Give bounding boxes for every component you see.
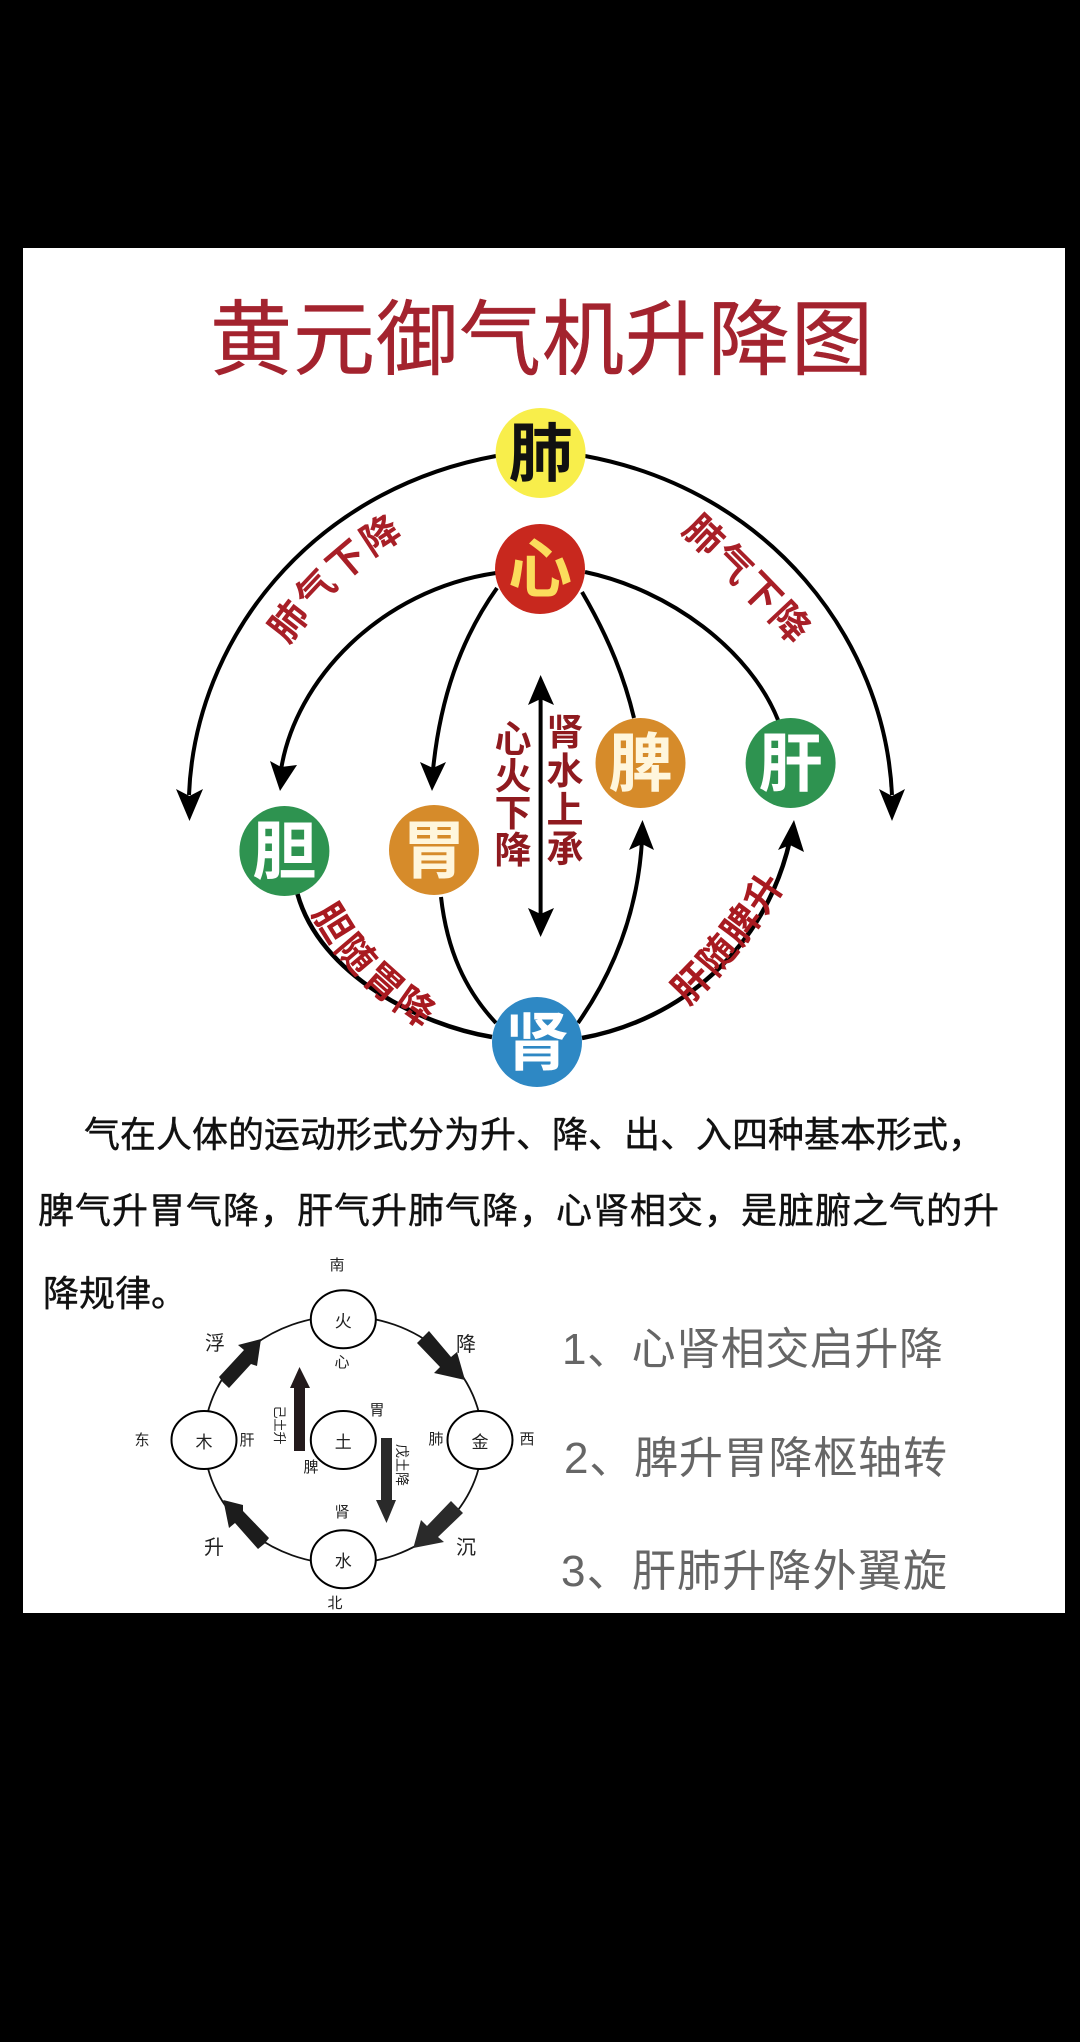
diagram labels: 升	[204, 1536, 224, 1559]
label: kidney water rises: 肾	[546, 712, 584, 753]
node: fire: 火	[335, 1312, 352, 1331]
label: heart fire descends: 火	[494, 756, 532, 797]
node: fire	[311, 1290, 376, 1348]
arrow: upper left	[219, 1339, 261, 1388]
node: lung: 肺	[509, 418, 573, 490]
label: heart fire descends: 下	[494, 793, 532, 834]
list: three key points: 1、心肾相交启升降	[562, 1325, 943, 1374]
node: gallbladder: 胆	[252, 816, 316, 888]
arrow: kidney to spleen	[578, 820, 654, 1023]
arrow: lower right	[413, 1501, 463, 1548]
label: kidney water rises: 承	[546, 829, 584, 870]
diagram labels: 己土升	[272, 1405, 287, 1445]
list: three key points	[561, 1325, 947, 1596]
node: spleen	[596, 718, 686, 808]
arrow: upper right	[417, 1331, 465, 1380]
diagram labels	[134, 1257, 535, 1612]
node: earth: 土	[335, 1433, 352, 1452]
node: heart	[495, 524, 585, 614]
label: kidney water rises: 上	[546, 790, 584, 831]
diagram labels: 沉	[456, 1536, 476, 1559]
label: heart fire descends: 降	[494, 830, 532, 871]
text block: description paragraph	[38, 1114, 999, 1314]
line: gallbladder to kidney	[298, 894, 492, 1037]
label: lung qi descends left: 肺气下降	[265, 514, 401, 645]
label: lung qi descends right: 肺气下降	[680, 511, 812, 643]
node: heart: 心	[508, 534, 572, 606]
node: kidney	[492, 997, 582, 1087]
arrow: heart to stomach	[420, 588, 497, 791]
list: three key points: 2、脾升胃降枢轴转	[564, 1434, 947, 1483]
node: water	[311, 1530, 376, 1588]
label: heart fire descends: 心	[494, 719, 532, 760]
diagram labels: 肾	[334, 1504, 350, 1521]
diagram labels: 南	[329, 1257, 345, 1274]
node: metal: 金	[472, 1433, 488, 1452]
arrow: kidney to liver	[582, 820, 804, 1038]
arrow: heart and kidney double arrow	[528, 675, 554, 937]
diagram labels: 浮	[205, 1332, 225, 1355]
label: kidney water rises	[546, 712, 584, 870]
node: water: 水	[335, 1552, 352, 1571]
node: gallbladder	[239, 806, 329, 896]
node: kidney: 肾	[505, 1007, 569, 1079]
diagram labels: 胃	[369, 1402, 385, 1419]
text block: description paragraph: 降规律。	[43, 1273, 187, 1314]
diagram labels: 北	[327, 1595, 343, 1612]
node: stomach: 胃	[402, 815, 466, 887]
chart: five elements circulation diagram	[134, 1257, 535, 1612]
text block: description paragraph: 脾气升胃气降，肝气升肺气降，心肾相交，是脏腑之气的升	[38, 1190, 999, 1231]
node: wood: 木	[196, 1433, 212, 1452]
node: lung	[496, 408, 586, 498]
panel: white card	[23, 248, 1065, 1613]
label: kidney water rises: 水	[546, 751, 584, 792]
arrow: heart to gallbladder	[270, 573, 496, 791]
text block: description paragraph: 气在人体的运动形式分为升、降、出、入四种基本形式，	[84, 1114, 984, 1155]
arrow: lower left	[223, 1500, 269, 1549]
diagram labels: 心	[334, 1354, 350, 1371]
arrow: centre up	[290, 1367, 310, 1451]
diagram labels: 西	[519, 1431, 535, 1448]
node: metal	[448, 1411, 512, 1469]
node: wood	[172, 1411, 236, 1469]
node: earth	[311, 1411, 376, 1469]
chart: qi ascending and descending organ diagram	[176, 408, 905, 1087]
diagram labels: 降	[456, 1333, 476, 1356]
line: heart to spleen	[582, 592, 634, 718]
list: three key points: 3、肝肺升降外翼旋	[561, 1547, 947, 1596]
label: liver follows spleen: 肝随脾升	[668, 874, 783, 1007]
diagram labels: 东	[134, 1432, 150, 1449]
ring	[204, 1316, 482, 1564]
line: stomach to kidney	[441, 897, 496, 1023]
arrow: outer left lung descent	[176, 456, 496, 821]
node: stomach	[389, 805, 479, 895]
arrow: outer right lung descent	[585, 456, 905, 821]
diagram labels: 肝	[239, 1432, 255, 1449]
arrow: centre down	[376, 1438, 396, 1523]
node: liver: 肝	[759, 728, 823, 800]
node: spleen: 脾	[608, 728, 672, 800]
label: gallbladder follows stomach: 胆随胃降	[310, 900, 436, 1026]
label: heart fire descends	[494, 719, 532, 871]
node: liver	[746, 718, 836, 808]
title: 黄元御气机升降图	[210, 295, 873, 386]
diagram labels: 肺	[428, 1431, 444, 1448]
line: heart to liver	[585, 572, 778, 720]
diagram labels: 脾	[303, 1459, 319, 1476]
diagram labels: 戊土降	[394, 1444, 410, 1486]
